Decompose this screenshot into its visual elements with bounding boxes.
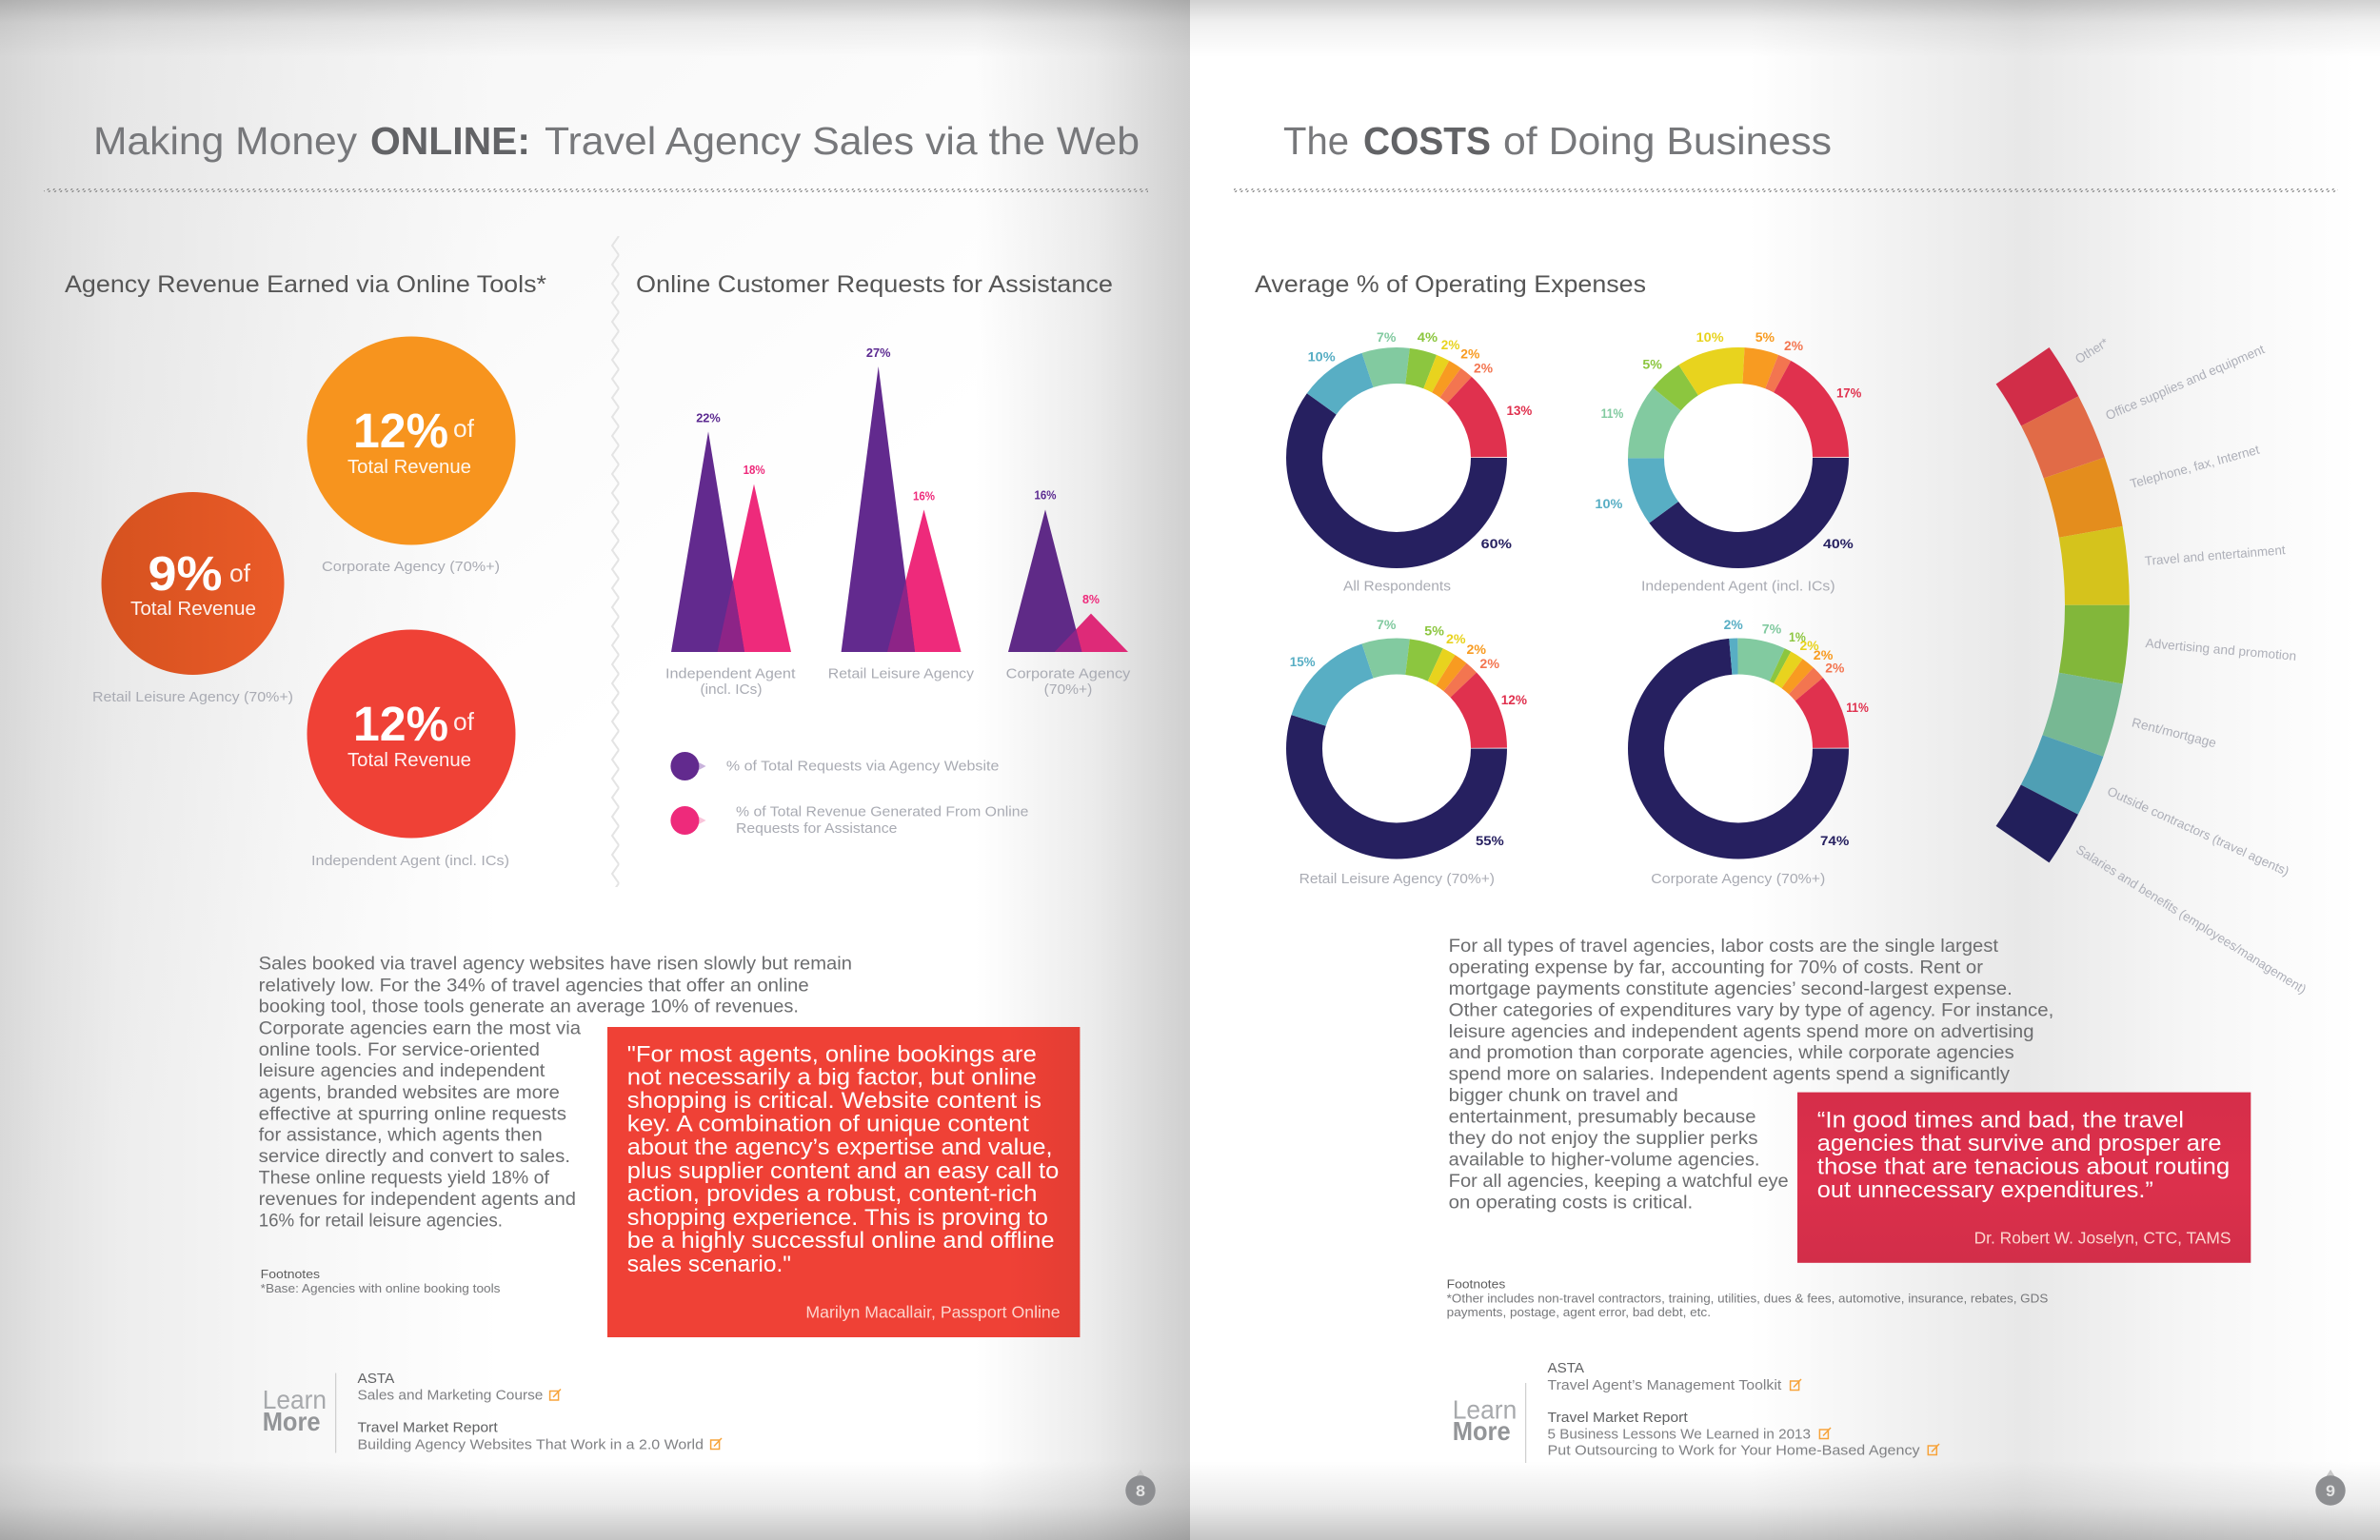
body text: costs: available to higher-volume agencies.: [1449, 1150, 1759, 1171]
heading: operating expenses: Average % of Operating Expenses: [1255, 271, 1646, 298]
arc segment: contractors: [2021, 735, 2103, 815]
learn more: left page: Building Agency Websites That Work in a 2.0 World: [358, 1436, 704, 1452]
callout: Marilyn Macallair quote: be a highly successful online and offline: [627, 1228, 1055, 1254]
callout: Marilyn Macallair quote: [607, 1027, 1080, 1337]
donut chart: corporate agency: [1646, 657, 1831, 841]
body text: costs: [1449, 936, 2053, 1213]
learn more: left page: Learn: [263, 1385, 327, 1414]
donut labels: corporate agency: Corporate Agency (70%+): [1651, 871, 1825, 887]
body text: online sales: [259, 954, 852, 1232]
body text: costs: spend more on salaries. Independent agents spend a significantly: [1449, 1064, 2010, 1085]
donut labels: independent agent: Independent Agent (incl. ICs): [1641, 579, 1835, 594]
arc labels: Other*: [2073, 335, 2112, 366]
donut labels: independent agent: 5%: [1642, 357, 1662, 372]
learn more: left page: Sales and Marketing Course: [358, 1388, 543, 1404]
arc labels: Telephone, fax, Internet: [2129, 443, 2261, 491]
callout: Robert Joselyn quote: those that are tenacious about routing: [1817, 1155, 2230, 1180]
arc labels: [2073, 335, 2309, 997]
body text: costs: bigger chunk on travel and: [1449, 1085, 1678, 1106]
bars: retail leisure agency: 27%: [866, 346, 891, 360]
body text: costs: entertainment, presumably because: [1449, 1107, 1755, 1128]
icon: external link: [711, 1438, 722, 1449]
arc segment: advertising: [2059, 605, 2130, 683]
arc labels: Advertising and promotion: [2145, 636, 2297, 663]
heading: online customer requests: Online Customer Requests for Assistance: [636, 271, 1113, 298]
arc segment: salaries: [1996, 784, 2078, 862]
body text: costs: and promotion than corporate agencies, while corporate agencies: [1449, 1042, 2014, 1063]
donut labels: independent agent: [1595, 329, 1862, 594]
callout: Marilyn Macallair quote: sales scenario.": [627, 1252, 791, 1277]
bars: independent agent: 18%: [744, 463, 765, 477]
bars: corporate agency: 16%: [1034, 488, 1057, 503]
donut chart: independent agent: [1646, 365, 1831, 550]
callout: Robert Joselyn quote: Dr. Robert W. Joselyn, CTC, TAMS: [1974, 1229, 2231, 1248]
circle stat: independent agent 12%: [307, 630, 516, 869]
donut labels: corporate agency: 2%: [1825, 660, 1845, 675]
arc segment: other: [1996, 347, 2078, 426]
learn more: right page: [1453, 1360, 1939, 1463]
donut labels: retail leisure agency: 55%: [1476, 833, 1504, 848]
legend item: revenue from requests: [670, 804, 1028, 837]
callout: Robert Joselyn quote: agencies that survive and prosper are: [1817, 1131, 2222, 1156]
bars: independent agent: [665, 410, 796, 698]
learn more: right page: 5 Business Lessons We Learned in 2013: [1548, 1426, 1811, 1442]
heading: agency revenue: Agency Revenue Earned via Online Tools*: [65, 271, 546, 298]
footnotes: right page: payments, postage, agent error, bad debt, etc.: [1447, 1306, 1711, 1319]
footnotes: left page: Footnotes: [261, 1268, 320, 1281]
donut labels: independent agent: 40%: [1823, 536, 1854, 551]
callout: Marilyn Macallair quote: plus supplier content and an easy call to: [627, 1158, 1059, 1184]
bars: independent agent: 22%: [696, 410, 721, 424]
circle stat: retail leisure agency 9%: Retail Leisure Agency (70%+): [92, 689, 293, 705]
body text: online sales: service directly and convert to sales.: [259, 1146, 570, 1167]
body text: online sales: online tools. For service-oriented: [259, 1039, 540, 1060]
body text: online sales: agents, branded websites are more: [259, 1082, 560, 1103]
body text: online sales: revenues for independent agents and: [259, 1189, 576, 1210]
donut labels: retail leisure agency: 15%: [1290, 654, 1316, 669]
circle stat: corporate agency 12%: Corporate Agency (70%+): [322, 559, 500, 575]
donut labels: corporate agency: 11%: [1846, 700, 1869, 715]
circle stat: independent agent 12%: Independent Agent (incl. ICs): [311, 853, 509, 869]
icon: external link: [1819, 1428, 1831, 1439]
donut labels: corporate agency: 2%: [1799, 638, 1819, 653]
bars: retail leisure agency: 16%: [913, 488, 935, 503]
body text: online sales: booking tool, those tools generate an average 10% of revenues.: [259, 997, 799, 1017]
donut labels: retail leisure agency: Retail Leisure Agency (70%+): [1299, 871, 1495, 887]
icon: external link: [1791, 1379, 1801, 1390]
bars: independent agent: (incl. ICs): [701, 681, 762, 698]
donut labels: retail leisure agency: [1290, 617, 1528, 887]
donut labels: independent agent: 17%: [1836, 385, 1862, 401]
learn more: right page: Travel Agent’s Management Toolkit: [1548, 1377, 1782, 1393]
donut chart: all respondents: [1304, 365, 1489, 550]
body text: costs: operating expense by far, accounting for 70% of costs. Rent or: [1449, 957, 1984, 977]
donut labels: independent agent: 10%: [1696, 329, 1724, 345]
circle stat: independent agent 12%: Total Revenue: [347, 750, 471, 771]
donut labels: independent agent: 2%: [1784, 338, 1804, 353]
body text: costs: mortgage payments constitute agencies’ second-largest expense.: [1449, 978, 2013, 999]
donut labels: all respondents: 2%: [1474, 361, 1494, 376]
icon: external link: [550, 1390, 561, 1400]
body text: costs: they do not enjoy the supplier perks: [1449, 1128, 1758, 1149]
learn more: right page: Travel Market Report: [1548, 1410, 1689, 1426]
body text: online sales: 16% for retail leisure agencies.: [259, 1211, 503, 1232]
circle stat: corporate agency 12%: 12%: [353, 404, 448, 458]
learn more: left page: [263, 1371, 722, 1452]
body text: online sales: effective at spurring online requests: [259, 1104, 566, 1125]
footnotes: right page: *Other includes non-travel contractors, training, utilities, dues & fees, automotive, insurance, rebates, GDS: [1447, 1292, 2048, 1305]
page number 9: [2315, 1470, 2346, 1506]
legend item: website requests: [670, 752, 999, 780]
page background: right: [1190, 0, 2380, 1540]
title: Making Money Online: Making Money: [93, 119, 358, 163]
donut labels: all respondents: 13%: [1506, 403, 1533, 418]
donut labels: all respondents: 7%: [1377, 329, 1397, 345]
callout: Marilyn Macallair quote: action, provides a robust, content-rich: [627, 1181, 1038, 1207]
page background: left: [0, 0, 1190, 1540]
title: The Costs of Doing Business: [1283, 119, 1832, 163]
donut labels: corporate agency: 74%: [1820, 833, 1850, 848]
donut labels: corporate agency: [1651, 617, 1869, 887]
circle stat: corporate agency 12%: Total Revenue: [347, 457, 471, 478]
arc legend: expense categories: [1996, 335, 2309, 997]
donut labels: corporate agency: 2%: [1814, 647, 1834, 662]
panel: right page, costs: [1234, 119, 2346, 1506]
callout: Marilyn Macallair quote: about the agency’s expertise and value,: [627, 1135, 1053, 1160]
icon: external link: [1928, 1444, 1939, 1454]
arc segment: office supplies: [2021, 396, 2105, 478]
donut labels: all respondents: 4%: [1418, 329, 1438, 345]
footnotes: left page: *Base: Agencies with online booking tools: [261, 1282, 501, 1295]
title: The Costs of Doing Business: The: [1283, 119, 1349, 163]
title: Making Money Online: Travel Agency Sales via the Web: [545, 119, 1140, 163]
learn more: right page: More: [1453, 1416, 1511, 1446]
learn more: right page: ASTA: [1548, 1360, 1584, 1376]
arc segment: telephone: [2044, 457, 2123, 538]
body text: online sales: These online requests yield 18% of: [259, 1168, 550, 1189]
donut labels: retail leisure agency: 12%: [1501, 692, 1528, 707]
footnotes: left page: [261, 1268, 501, 1295]
title: The Costs of Doing Business: COSTS: [1363, 119, 1491, 163]
learn more: left page: More: [263, 1407, 321, 1436]
callout: Robert Joselyn quote: out unnecessary expenditures.”: [1817, 1177, 2153, 1203]
circle stat: retail leisure agency 9%: Total Revenue: [130, 599, 256, 620]
bars: retail leisure agency: Retail Leisure Agency: [828, 665, 975, 681]
body text: costs: leisure agencies and independent agents spend more on advertising: [1449, 1021, 2033, 1042]
body text: costs: For all agencies, keeping a watchful eye: [1449, 1171, 1789, 1192]
arc segment: rent: [2043, 673, 2123, 757]
donut labels: all respondents: 60%: [1481, 536, 1513, 551]
bars: corporate agency: (70%+): [1044, 681, 1092, 698]
donut labels: retail leisure agency: 5%: [1424, 622, 1444, 638]
donut labels: all respondents: 2%: [1460, 346, 1480, 362]
legend item: revenue from requests: Requests for Assistance: [736, 820, 897, 837]
donut labels: retail leisure agency: 7%: [1377, 617, 1397, 632]
arc labels: Office supplies and equipment: [2104, 342, 2267, 423]
arc labels: Outside contractors (travel agents): [2105, 784, 2291, 879]
legend item: website requests: % of Total Requests via Agency Website: [726, 758, 999, 774]
donut labels: all respondents: 2%: [1441, 337, 1460, 352]
bars: corporate agency: Corporate Agency: [1006, 665, 1131, 681]
donut labels: retail leisure agency: 2%: [1479, 656, 1500, 671]
learn more: left page: ASTA: [358, 1371, 394, 1387]
arc labels: Salaries and benefits (employees/management): [2073, 842, 2309, 997]
circle stat: retail leisure agency 9%: 9%: [149, 546, 223, 601]
legend: requests chart: [670, 752, 1028, 837]
page number 9: 9: [2326, 1482, 2335, 1500]
triangle chart: online customer requests: [665, 346, 1131, 698]
learn more: left page: Travel Market Report: [358, 1420, 499, 1436]
circle stat: independent agent 12%: 12%: [353, 697, 448, 751]
donut labels: retail leisure agency: 2%: [1466, 642, 1487, 657]
donut chart: retail leisure agency: [1304, 657, 1489, 841]
learn more: right page: Learn: [1453, 1394, 1517, 1424]
callout: Marilyn Macallair quote: "For most agents, online bookings are: [627, 1041, 1037, 1067]
body text: costs: Other categories of expenditures vary by type of agency. For instance,: [1449, 999, 2053, 1020]
body text: online sales: Corporate agencies earn the most via: [259, 1017, 581, 1038]
donut labels: corporate agency: 7%: [1762, 622, 1782, 637]
callout: Robert Joselyn quote: [1797, 1093, 2251, 1263]
donut labels: all respondents: [1308, 329, 1533, 594]
arc labels: Travel and entertainment: [2144, 543, 2286, 568]
footnotes: right page: Footnotes: [1447, 1278, 1505, 1292]
page number 8: [1125, 1470, 1156, 1506]
bars: retail leisure agency: [828, 346, 975, 681]
page number 8: 8: [1136, 1482, 1145, 1500]
circle stat: corporate agency 12%: [307, 337, 516, 575]
donut labels: independent agent: 10%: [1595, 496, 1623, 511]
circle stat: independent agent 12%: of: [453, 707, 475, 736]
callout: Marilyn Macallair quote: shopping experience. This is proving to: [627, 1205, 1048, 1231]
callout: Marilyn Macallair quote: Marilyn Macallair, Passport Online: [805, 1302, 1061, 1321]
title: Making Money Online: ONLINE:: [370, 119, 530, 163]
body text: online sales: Sales booked via travel agency websites have risen slowly but remain: [259, 954, 852, 975]
title: Making Money Online: [93, 119, 1140, 163]
legend item: revenue from requests: % of Total Revenue Generated From Online: [736, 804, 1028, 820]
bars: corporate agency: [1006, 488, 1131, 698]
footnotes: right page: [1447, 1278, 2048, 1319]
circle stat: corporate agency 12%: of: [453, 414, 475, 443]
circle stat: retail leisure agency 9%: of: [229, 559, 251, 587]
learn more: right page: Put Outsourcing to Work for Your Home-Based Agency: [1548, 1443, 1920, 1459]
body text: costs: For all types of travel agencies, labor costs are the single largest: [1449, 936, 1999, 957]
callout: Marilyn Macallair quote: shopping is critical. Website content is: [627, 1088, 1041, 1114]
donut labels: all respondents: All Respondents: [1343, 579, 1451, 594]
arc labels: Rent/mortgage: [2131, 715, 2218, 750]
donut labels: corporate agency: 1%: [1789, 629, 1806, 644]
donut labels: corporate agency: 2%: [1724, 617, 1743, 632]
donut labels: independent agent: 5%: [1755, 329, 1775, 345]
title: The Costs of Doing Business: of Doing Business: [1503, 119, 1832, 163]
bars: independent agent: Independent Agent: [665, 665, 796, 681]
callout: Robert Joselyn quote: “In good times and bad, the travel: [1817, 1108, 2184, 1133]
panel: left page, online sales: [44, 119, 1156, 1506]
bars: corporate agency: 8%: [1082, 592, 1100, 606]
body text: online sales: relatively low. For the 34% of travel agencies that offer an online: [259, 975, 809, 996]
arc segment: travel: [2059, 526, 2130, 605]
circle stat: retail leisure agency 9%: [92, 492, 293, 705]
body text: online sales: leisure agencies and independent: [259, 1060, 545, 1081]
donut labels: retail leisure agency: 2%: [1446, 631, 1466, 646]
body text: online sales: for assistance, which agents then: [259, 1124, 543, 1145]
callout: Marilyn Macallair quote: not necessarily a big factor, but online: [627, 1065, 1037, 1091]
callout: Marilyn Macallair quote: key. A combination of unique content: [627, 1112, 1029, 1137]
donut labels: all respondents: 10%: [1308, 348, 1336, 364]
body text: costs: on operating costs is critical.: [1449, 1192, 1693, 1213]
donut labels: independent agent: 11%: [1601, 405, 1624, 421]
